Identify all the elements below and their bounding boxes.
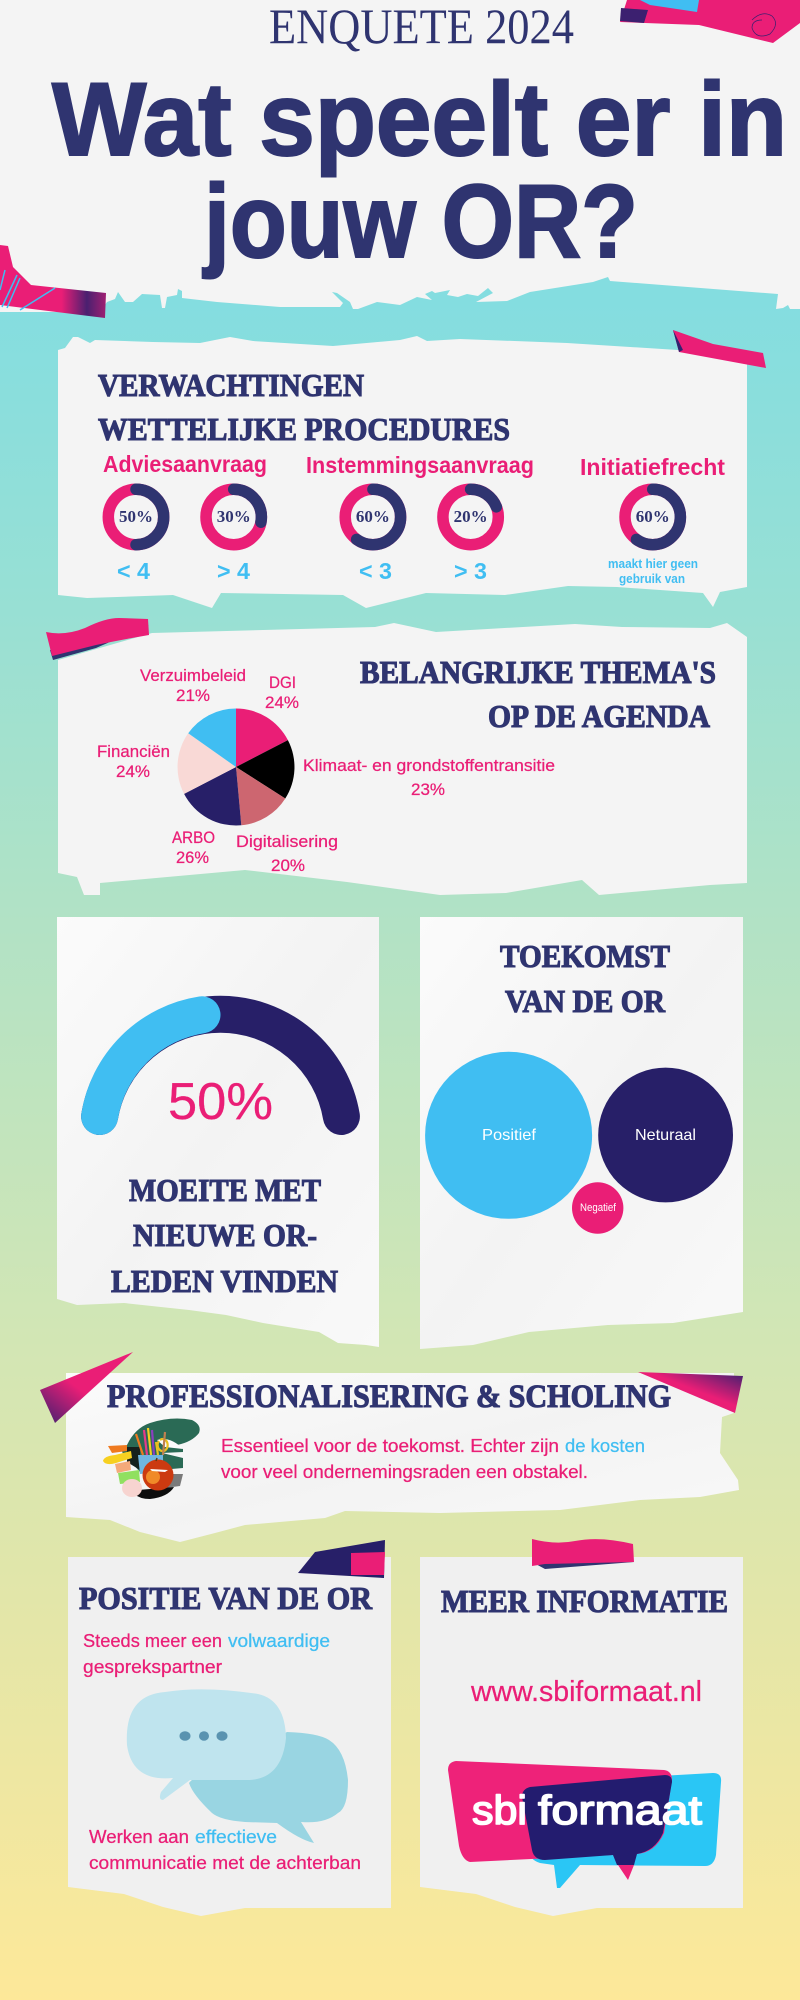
- label: ARBO: [172, 828, 215, 867]
- pie chart: [178, 708, 294, 826]
- subheading: instemmingsaanvraag: Instemmingsaanvraag: [306, 452, 534, 478]
- heading: POSITIE VAN DE OR: [79, 1580, 373, 1616]
- icon: school supplies and apple: [103, 1419, 200, 1499]
- panel: verwachtingen wettelijke procedures: [58, 330, 766, 608]
- label: DGI: DGI: [269, 673, 296, 692]
- label: more than 4: > 4: [217, 558, 250, 584]
- label: financien: 24%: [116, 762, 150, 781]
- icon: speech bubbles: [127, 1689, 348, 1843]
- title: Wat speelt er in: [52, 62, 787, 178]
- donut 30%: 30%: [217, 507, 251, 526]
- tape: top right: [620, 0, 800, 43]
- text: achterban: communicatie met de achterban: [89, 1853, 361, 1873]
- heading: [98, 367, 510, 447]
- heading: [111, 1172, 338, 1299]
- logo: sbi formaat: sbi: [472, 1787, 527, 1833]
- subheading: adviesaanvraag: Adviesaanvraag: [103, 451, 267, 477]
- gauge value: 50%: [168, 1073, 273, 1131]
- donut 20%: 20%: [454, 507, 488, 526]
- label: klimaat- en grondstoffentransitie: Klimaat- en grondstoffentransitie: [303, 756, 555, 775]
- label: verzuimbeleid: [140, 666, 246, 705]
- label: less than 3: < 3: [359, 558, 392, 584]
- heading: PROFESSIONALISERING & SCHOLING: [107, 1379, 671, 1415]
- text: gesprekspartner: [83, 1631, 330, 1677]
- logo: sbi formaat: formaat: [538, 1787, 703, 1833]
- donut 60%: [345, 489, 401, 545]
- header section: [0, 0, 800, 318]
- bubble: positief: [425, 1052, 592, 1219]
- tape: [532, 1539, 634, 1569]
- heading: [360, 654, 716, 734]
- label: klimaat- en grondstoffentransitie: 23%: [411, 780, 445, 799]
- text block: Essentieel voor de toekomst. Echter zijn: [221, 1436, 559, 1456]
- bubble: negatief: Negatief: [580, 1202, 617, 1214]
- label: klimaat- en grondstoffentransitie: [303, 756, 555, 799]
- note: maakt hier geen gebruik van: maakt hier geen: [608, 556, 698, 571]
- bubble: neutraal: Neturaal: [635, 1127, 696, 1144]
- tape: [46, 618, 149, 660]
- label: financien: Financiën: [97, 742, 170, 761]
- tape: [673, 330, 766, 368]
- heading: OP DE AGENDA: [488, 698, 710, 734]
- website link: www.sbiformaat.nl: [470, 1676, 702, 1708]
- label: financien: [97, 742, 170, 781]
- bubble: negatief: [572, 1182, 623, 1234]
- text block: voor veel ondernemingsraden een obstakel.: [221, 1462, 588, 1482]
- label: ARBO: ARBO: [172, 828, 215, 847]
- label: digitalisering: 20%: [271, 856, 305, 875]
- tape: [298, 1540, 385, 1578]
- heading: TOEKOMST: [500, 938, 670, 974]
- text block: [221, 1436, 645, 1482]
- heading: [500, 938, 670, 1019]
- text: gesprekspartner: gesprekspartner: [83, 1657, 222, 1677]
- heading: MEER INFORMATIE: [441, 1583, 728, 1619]
- title: [52, 62, 787, 280]
- heading: VERWACHTINGEN: [98, 367, 364, 403]
- donut initiatiefrecht 60%: [625, 489, 680, 545]
- donut initiatiefrecht 60%: 60%: [636, 507, 670, 526]
- donut 60%: 60%: [356, 507, 390, 526]
- label: ARBO: 26%: [176, 848, 209, 867]
- donut 30%: [206, 489, 261, 545]
- label: digitalisering: Digitalisering: [236, 832, 338, 851]
- label: DGI: 24%: [265, 693, 299, 712]
- note: maakt hier geen gebruik van: gebruik van: [619, 571, 685, 586]
- heading: BELANGRIJKE THEMA'S: [360, 654, 716, 690]
- panel: moeite met nieuwe or-leden vinden: [57, 917, 379, 1347]
- text: achterban: [89, 1827, 361, 1873]
- donut 50%: 50%: [119, 507, 153, 526]
- title: jouw OR?: [202, 164, 638, 280]
- tape: left: [0, 245, 106, 318]
- text: gesprekspartner: volwaardige: [228, 1631, 330, 1651]
- note: maakt hier geen gebruik van: [608, 556, 698, 586]
- label: verzuimbeleid: Verzuimbeleid: [140, 666, 246, 685]
- text: achterban: effectieve: [195, 1827, 277, 1847]
- text: achterban: Werken aan: [89, 1827, 189, 1847]
- heading: MOEITE MET: [129, 1172, 321, 1208]
- subheading: initiatiefrecht: Initiatiefrecht: [580, 454, 725, 480]
- panel: positie van de or: [68, 1540, 391, 1916]
- logo: sbi formaat: [448, 1761, 721, 1888]
- heading: LEDEN VINDEN: [111, 1263, 338, 1299]
- heading: VAN DE OR: [505, 983, 666, 1019]
- label: verzuimbeleid: 21%: [176, 686, 210, 705]
- heading: NIEUWE OR-: [133, 1217, 317, 1253]
- text block: de kosten: [565, 1436, 645, 1456]
- heading: WETTELIJKE PROCEDURES: [98, 411, 510, 447]
- label: DGI: [265, 673, 299, 712]
- bubble: positief: Positief: [482, 1127, 537, 1144]
- tape: right triangle: [638, 1372, 743, 1413]
- donut 20%: [443, 489, 498, 545]
- label: more than 3: > 3: [454, 558, 487, 584]
- text: gesprekspartner: Steeds meer een: [83, 1631, 222, 1651]
- gauge chart: [100, 1014, 341, 1116]
- label: digitalisering: [236, 832, 338, 875]
- panel: toekomst van de or: [420, 917, 743, 1349]
- panel: meer informatie: [420, 1539, 743, 1916]
- donut 50%: [108, 489, 164, 545]
- label: less than 4: < 4: [117, 558, 150, 584]
- panel: belangrijke thema's: [46, 618, 747, 895]
- bubble: neutraal: [598, 1068, 733, 1202]
- tape: left triangle: [40, 1352, 133, 1423]
- panel: professionalisering en scholing: [40, 1352, 743, 1542]
